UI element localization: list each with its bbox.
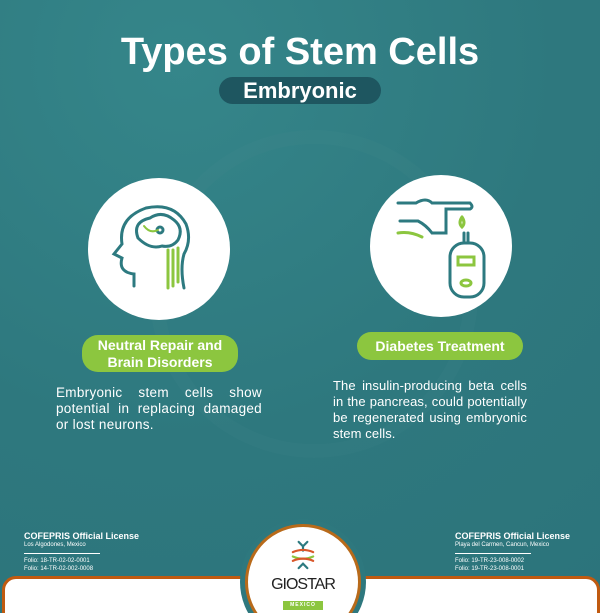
subtitle pill [219, 77, 381, 104]
logo: GIOSTAR [271, 576, 335, 593]
license left [24, 531, 139, 572]
subtitle pill: Embryonic [243, 78, 357, 103]
license left: Los Algodones, Mexico [24, 542, 86, 548]
text: neurons: Embryonic stem cells show potential in replacing damaged or lost neurons. [56, 385, 262, 432]
license right: COFEPRIS Official License [455, 531, 570, 541]
pill: diabetes: Diabetes Treatment [375, 338, 505, 354]
license right: Folio: 19-TR-23-008-0001 [455, 566, 524, 572]
pill: neutral repair: Neutral Repair and [98, 336, 222, 352]
icon: glucose meter [370, 175, 512, 317]
license left: Folio: 18-TR-02-02-0001 [24, 558, 90, 564]
logo [245, 524, 361, 613]
text: insulin: The insulin-producing beta cells in the pancreas, could potentially be regenerated using embryonic stem cells. [333, 378, 527, 441]
icon: brain head [88, 178, 230, 320]
license right: Playa del Carmen, Cancun, Mexico [455, 542, 549, 548]
logo: MEXICO [290, 602, 316, 608]
pill: neutral repair: Brain Disorders [107, 354, 213, 370]
license right [455, 531, 570, 572]
license left: Folio: 14-TR-02-002-0008 [24, 566, 93, 572]
pill: neutral repair [82, 335, 238, 372]
pill: diabetes [357, 332, 523, 360]
license left: COFEPRIS Official License [24, 531, 139, 541]
decorative ring [150, 130, 478, 458]
license right: Folio: 19-TR-23-008-0002 [455, 558, 524, 564]
bottom white band [2, 576, 600, 613]
title: Types of Stem Cells [121, 31, 479, 73]
